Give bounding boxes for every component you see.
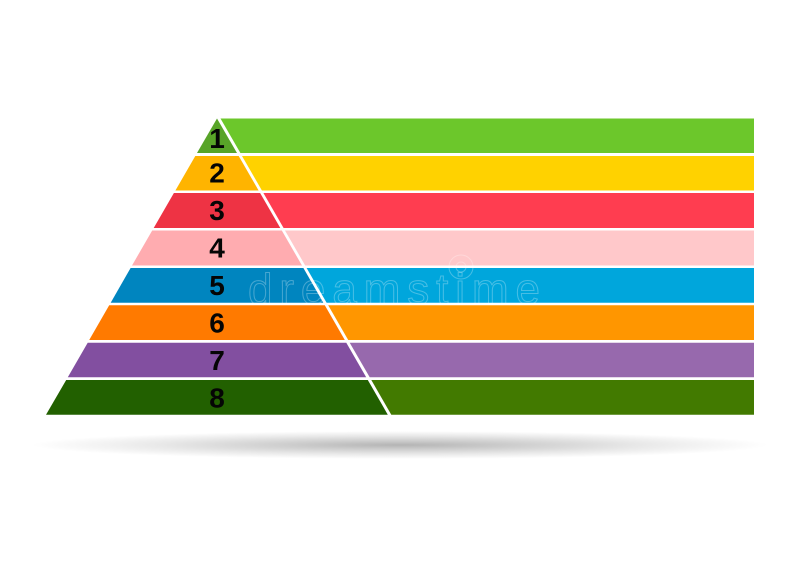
pyramid level 4 bbox=[132, 230, 302, 266]
pyramid level 1 bbox=[197, 118, 237, 153]
pyramid bbox=[46, 118, 388, 415]
level numbers: 5 bbox=[209, 270, 225, 301]
bar 3 bbox=[263, 193, 754, 228]
level numbers: 4 bbox=[209, 232, 225, 264]
bar 8 bbox=[371, 380, 754, 415]
level numbers: 2 bbox=[209, 158, 225, 188]
pyramid level 6 bbox=[89, 305, 345, 340]
level numbers bbox=[209, 123, 225, 414]
bar 5 bbox=[307, 268, 754, 303]
level numbers: 6 bbox=[209, 308, 225, 338]
horizontal bars bbox=[220, 118, 754, 415]
ground shadow bbox=[32, 431, 768, 459]
level numbers: 8 bbox=[209, 382, 225, 414]
pyramid level 2 bbox=[175, 156, 259, 190]
bar 1 bbox=[220, 118, 754, 153]
watermark: dreamstime bbox=[248, 265, 540, 314]
pyramid level 3 bbox=[154, 193, 280, 228]
level numbers: 1 bbox=[209, 123, 225, 154]
bar 2 bbox=[242, 156, 754, 190]
bar 6 bbox=[328, 305, 754, 340]
pyramid level 7 bbox=[68, 343, 366, 377]
level numbers: 7 bbox=[209, 345, 225, 376]
bar 4 bbox=[285, 230, 754, 266]
level numbers: 3 bbox=[209, 195, 225, 226]
pyramid level 8 bbox=[46, 380, 388, 415]
pyramid level 5 bbox=[111, 268, 323, 303]
bar 7 bbox=[350, 343, 754, 377]
